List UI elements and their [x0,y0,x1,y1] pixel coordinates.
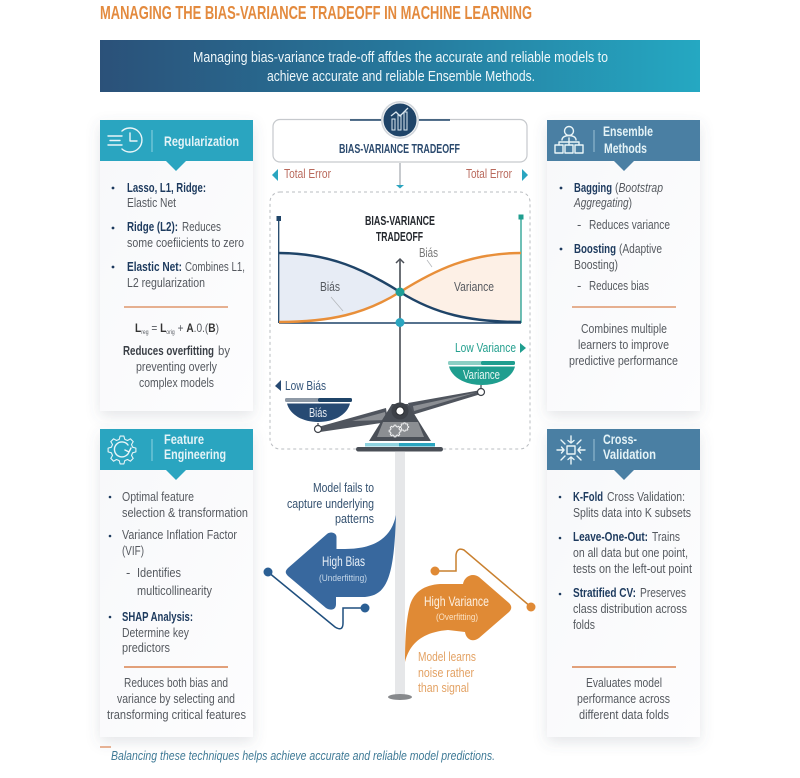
bullet list: feature engineering: - [126,565,130,580]
summary: feature engineering [107,675,246,722]
formula: reg [141,330,149,336]
note: high bias: patterns [335,511,374,526]
panel header: cross-validation [547,429,700,480]
bullet list: ensemble methods: Boosting [574,241,616,256]
bullet list: cross-validation: Splits data into K subsets [573,505,691,520]
total error left [272,166,332,181]
panel header: feature engineering: Feature [164,431,204,447]
bullet list: feature engineering: (VIF) [122,543,144,558]
panel: cross-validation [547,429,700,737]
bullet list: feature engineering: SHAP Analysis: [122,609,193,624]
bullet list: cross-validation: on all data but one point, [573,545,688,560]
note: high variance: noise rather [418,665,475,680]
chart: bias-variance curves: Variance [454,279,494,294]
note: high variance [418,649,476,695]
bullet list: cross-validation: class distribution across [573,601,687,616]
bullet list: ensemble methods: (Bootstrap [615,180,663,195]
formula: orig [166,330,175,336]
icon: chart badge [381,101,419,139]
summary: ensemble methods: learners to improve [578,337,669,352]
summary: regularization: preventing overly [136,359,217,374]
label: low bias: Low Biás [285,378,326,393]
bullet list: regularization [112,180,245,290]
panel: ensemble methods [547,120,700,411]
arrow: high bias: (Underfitting) [319,573,367,584]
bullet list: ensemble methods: Boosting) [574,257,618,272]
panel header: regularization: Regularization [164,133,239,149]
pan: bias: Biás [309,405,327,420]
bullet list: ensemble methods: - [577,217,581,232]
panel header: ensemble methods: Ensemble [603,123,653,139]
bullet list: cross-validation: Preserves [640,585,686,600]
summary: feature engineering: Reduces both bias and [124,675,228,690]
summary: regularization: by [218,343,230,358]
bullet list: ensemble methods: - [577,278,581,293]
pan: bias [285,398,352,422]
bullet list: ensemble methods: (Adaptive [619,241,662,256]
bullet list: regularization: Lasso, L1, Ridge: [127,180,206,195]
note: high variance: than signal [418,680,469,695]
total error left: Total Error [284,166,332,181]
pole [388,452,412,700]
summary: regularization: Reduces overfitting [123,343,214,358]
bullet list: regularization: Ridge (L2): [127,219,178,234]
bullet list: feature engineering: multicollinearity [137,583,212,598]
banner: Managing bias-variance trade-off affdes the accurate and reliable models to [193,49,608,66]
footer note: Balancing these techniques helps achieve accurate and reliable model predictions. [111,748,495,763]
bullet list: regularization: Elastic Net [127,195,176,210]
bullet list: ensemble methods: Aggregating) [573,195,632,210]
note: high bias [287,480,374,526]
arrow: high bias [286,515,396,610]
bullet list: regularization: L2 regularization [127,275,205,290]
arrow: high bias: High Bias [322,553,365,569]
panel header: ensemble methods: Methods [604,140,647,156]
summary: cross-validation: Evaluates model [586,675,662,690]
formula: L [135,321,141,335]
bullet list: ensemble methods: Reduces variance [589,217,670,232]
arrow: title to chart [396,163,404,188]
chart heading [365,213,435,244]
formula: L [160,321,166,335]
chart heading: BIAS-VARIANCE [365,213,435,228]
bullet list: feature engineering: predictors [122,640,170,655]
panel header: feature engineering: Engineering [164,446,226,462]
summary: feature engineering: variance by selecting and [117,691,235,706]
bullet list: feature engineering [109,489,248,655]
panel header: ensemble methods [547,120,700,171]
summary: cross-validation: different data folds [579,707,669,722]
formula: A.0.(B) [186,321,220,335]
summary: cross-validation [577,675,670,722]
bullet list: cross-validation: Leave-One-Out: [573,529,648,544]
panel: feature engineering [100,429,253,737]
pan: variance: Variance [463,367,500,382]
bullet list: feature engineering: Determine key [122,625,189,640]
bullet list: feature engineering: Optimal feature [122,489,194,504]
beam [318,390,481,432]
arrow: high variance: High Variance [424,593,489,609]
formula: + [175,321,186,335]
banner [100,40,700,92]
pan: variance [448,361,515,385]
total error right: Total Error [466,166,513,181]
summary: feature engineering: transforming critical features [107,707,246,722]
bullet list: regularization: Reduces [182,219,221,234]
label: low variance: Low Variance [455,340,516,355]
connector: high bias [264,568,370,629]
bullet list: feature engineering: Variance Inflation Factor [122,527,238,542]
note: high variance: Model learns [418,649,476,664]
summary: ensemble methods: Combines multiple [581,321,667,336]
bullet list: cross-validation: Cross Validation: [607,489,685,504]
bullet list: ensemble methods: Bagging [574,180,612,195]
formula: = [149,321,160,335]
chart: bias-variance curves: Biás [419,245,438,260]
chart: bias-variance curves [276,213,524,413]
bullet list: regularization: Elastic Net: [127,259,182,274]
bullet list: cross-validation: folds [573,617,595,632]
bullet list: ensemble methods: Reduces bias [589,278,649,293]
label: low bias [275,378,326,393]
connector: high variance [430,549,536,612]
note: high bias: Model fails to [313,480,374,495]
dashed frame [270,192,530,449]
bullet list: regularization: Combines L1, [185,259,245,274]
panel header: feature engineering [100,429,253,480]
banner: achieve accurate and reliable Ensemble Methods. [267,68,535,85]
bullet list: cross-validation: Stratified CV: [573,585,636,600]
center title box [273,101,527,162]
arrow: high variance: (Overfitting) [436,612,478,623]
summary: ensemble methods [569,321,678,368]
panel header: regularization [100,120,253,171]
title: MANAGING THE BIAS-VARIANCE TRADEOFF IN MACHINE LEARNING [100,3,532,23]
scale: balance [275,340,526,452]
summary: regularization [123,343,230,390]
bullet list: regularization: some coefiicients to zero [127,235,244,250]
bullet list: cross-validation: tests on the left-out point [573,561,692,576]
chart heading: TRADEOFF [376,229,423,244]
panel: regularization [100,120,253,411]
panel header: cross-validation: Cross- [603,431,637,447]
bullet list: ensemble methods [560,180,670,293]
bullet list: cross-validation: Trains [652,529,680,544]
stand with gears [356,402,443,452]
center title box: BIAS-VARIANCE TRADEOFF [339,141,460,156]
panel header: cross-validation: Validation [603,446,656,462]
summary: ensemble methods: predictive performance [569,353,678,368]
bullet list: cross-validation [559,489,692,632]
bullet list: feature engineering: selection & transformation [122,505,248,520]
bullet list: feature engineering: Identifies [137,565,181,580]
summary: cross-validation: performance across [577,691,670,706]
summary: regularization: complex models [139,375,214,390]
bullet list: cross-validation: K-Fold [573,489,603,504]
chart: bias-variance curves: Biás [320,279,340,294]
arrow: high variance [405,575,511,662]
note: high bias: capture underlying [287,496,374,511]
